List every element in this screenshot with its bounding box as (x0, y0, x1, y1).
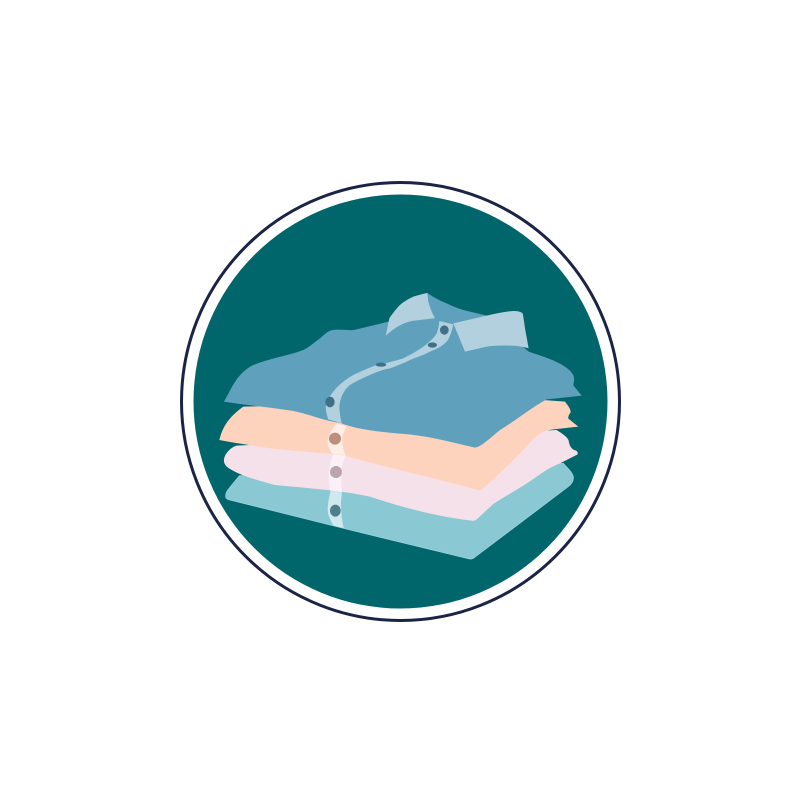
top shirt collar left (386, 293, 435, 336)
top shirt: blue body (224, 293, 582, 448)
pink placket and button (329, 454, 346, 492)
shirt stack (219, 293, 582, 559)
third shirt: pale pink (224, 430, 578, 521)
icon: stack of folded shirts badge (182, 182, 620, 620)
top shirt collar right (453, 311, 529, 352)
outer ring (182, 182, 620, 620)
second shirt: peach (219, 400, 578, 491)
peach placket and button (328, 423, 347, 455)
teal disc (194, 194, 608, 608)
top shirt buttons (325, 325, 449, 407)
bottom shirt: aqua (226, 463, 573, 559)
aqua placket and button (328, 491, 344, 528)
top shirt placket (326, 321, 453, 423)
